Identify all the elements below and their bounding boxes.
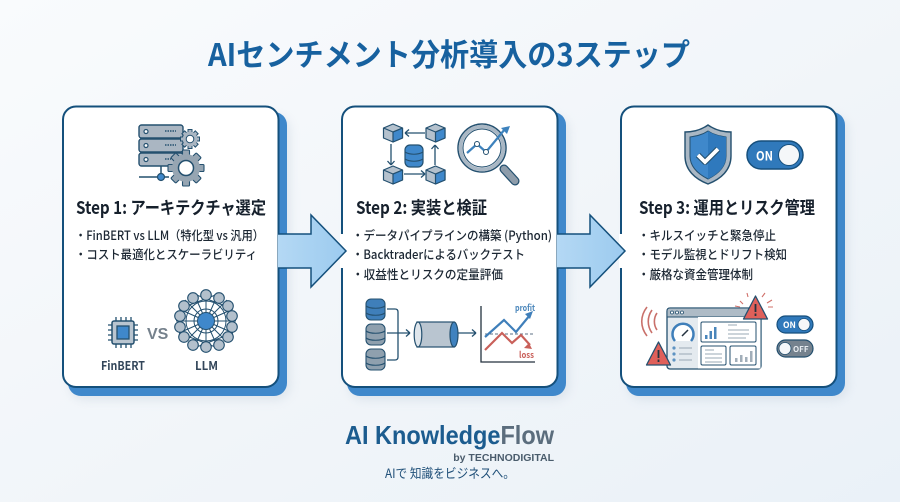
icon: small OFF toggle [777, 340, 813, 357]
footer: brand logo: by TECHNODIGITAL [453, 452, 555, 464]
icon: small ON toggle: ON [783, 319, 796, 331]
heading: step 1: Step 1: アーキテクチャ選定 [76, 195, 266, 220]
label: FinBERT: FinBERT [101, 357, 145, 374]
text block: step 1 bullets [75, 225, 264, 263]
panel: step 1 architecture selection [63, 106, 290, 400]
heading: step 2: Step 2: 実装と検証 [356, 195, 487, 220]
text block: step 3 bullets: ・モデル監視とドリフト検知 [638, 244, 787, 263]
icon: FinBERT chip [108, 317, 138, 348]
icon: shield with check [685, 125, 731, 184]
footer: brand logo [345, 420, 555, 464]
text block: step 2 bullets: ・収益性とリスクの定量評価 [352, 264, 503, 283]
arrow: step 2 to step 3 [557, 215, 625, 287]
footer: brand logo: AI KnowledgeFlow [345, 420, 555, 450]
title: AIセンチメント分析導入の3ステップ [207, 30, 690, 75]
icon: magnifier with chart [458, 124, 515, 181]
icon: small OFF toggle: OFF [793, 344, 809, 355]
label: VS: VS [147, 326, 169, 343]
text block: step 3 bullets: ・キルスイッチと緊急停止 [638, 225, 776, 244]
text block: step 2 bullets: ・データパイプラインの構築 (Python) [352, 225, 552, 244]
label: profit: profit [515, 301, 535, 314]
panel: step 2 implementation and validation [342, 106, 569, 400]
text block: step 3 bullets: ・厳格な資金管理体制 [638, 264, 753, 283]
panel: step 3 operation and risk management [621, 106, 848, 400]
arrow: step 1 to step 2 [278, 215, 346, 287]
heading: step 3: Step 3: 運用とリスク管理 [639, 195, 815, 220]
footer: tagline: AIで 知識をビジネスへ。 [385, 463, 515, 482]
text block: step 1 bullets: ・コスト最適化とスケーラビリティ [75, 244, 257, 263]
icon: ON toggle: ON [756, 146, 773, 164]
icon: ON toggle [747, 141, 803, 169]
illustration: monitoring dashboard with alerts [642, 293, 773, 369]
icon: small ON toggle [777, 316, 813, 333]
text block: step 2 bullets [352, 225, 552, 283]
icon: server with gears [139, 125, 204, 186]
text block: step 1 bullets: ・FinBERT vs LLM（特化型 vs 汎用） [75, 225, 264, 244]
text block: step 2 bullets: ・Backtraderによるバックテスト [352, 244, 525, 263]
icon: data flow cubes [384, 124, 445, 184]
text block: step 3 bullets [638, 225, 787, 283]
label: loss: loss [519, 348, 534, 361]
diagram: data pipeline to profit and loss chart [366, 299, 535, 370]
label: LLM: LLM [195, 357, 218, 374]
icon: LLM neural network [175, 290, 237, 352]
